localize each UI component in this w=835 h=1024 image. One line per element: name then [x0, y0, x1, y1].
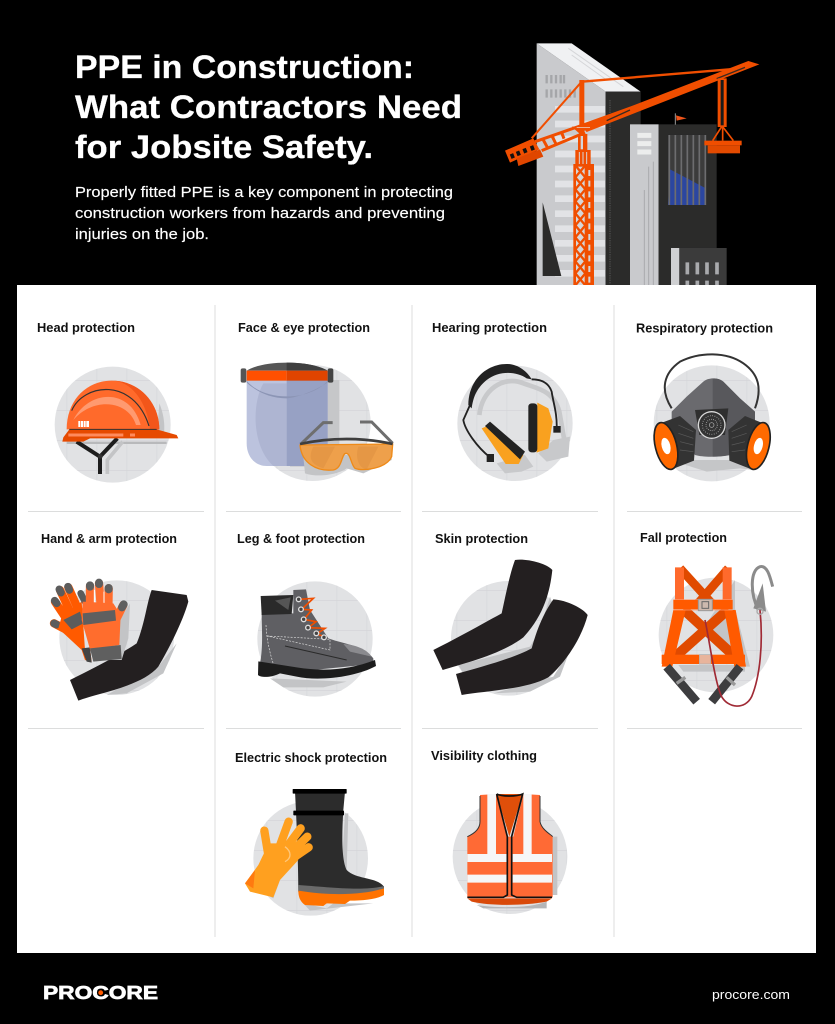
- panel: hand and arm protection: [41, 531, 188, 701]
- icon: high-visibility vest: [453, 794, 567, 914]
- intro text: [75, 185, 453, 243]
- icon: ear muffs: [457, 364, 573, 481]
- logo: Procore: PROCORE: [43, 982, 158, 1003]
- right glove: [82, 583, 124, 662]
- icon: respirator mask: [650, 354, 774, 481]
- heading: electric shock protection: Electric shock protection: [235, 750, 387, 765]
- icon: arm sleeves: [433, 560, 588, 696]
- icon: rubber boot and glove: [245, 789, 384, 916]
- title: What Contractors Need: [75, 89, 462, 125]
- heading: respiratory protection: Respiratory protection: [636, 320, 773, 336]
- panel: head protection: [37, 320, 178, 483]
- heading: face and eye protection: Face & eye protection: [238, 320, 370, 335]
- title: [75, 49, 462, 165]
- panel: fall protection: [640, 530, 773, 706]
- footer website: procore.com: [712, 987, 790, 1002]
- heading: fall protection: Fall protection: [640, 530, 727, 545]
- icon: hard hat: [55, 367, 178, 483]
- title: for Jobsite Safety.: [75, 129, 373, 165]
- heading: hand and arm protection: Hand & arm protection: [41, 531, 177, 546]
- crane hoist and bucket: [704, 78, 742, 153]
- heading: leg and foot protection: Leg & foot protection: [237, 531, 365, 546]
- panel: respiratory protection: [636, 320, 774, 481]
- panel: visibility clothing: [431, 748, 567, 914]
- panel: electric shock protection: [235, 750, 387, 916]
- white panel: [17, 285, 816, 953]
- panel: hearing protection: [432, 320, 573, 481]
- crane jib: [505, 61, 759, 166]
- icon: gloves and arm sleeve: [54, 580, 188, 701]
- intro text: Properly fitted PPE is a key component in protecting: [75, 185, 453, 201]
- panel: face and eye protection: [238, 320, 393, 481]
- heading: visibility clothing: Visibility clothing: [431, 748, 537, 763]
- title: PPE in Construction:: [75, 49, 414, 85]
- panel: leg and foot protection: [237, 531, 376, 697]
- crane mast: [573, 80, 594, 285]
- icon: work boot: [257, 581, 376, 697]
- heading: head protection: Head protection: [37, 320, 135, 335]
- panel: skin protection: [433, 531, 588, 696]
- heading: hearing protection: Hearing protection: [432, 320, 547, 335]
- intro text: construction workers from hazards and preventing: [75, 206, 445, 222]
- heading: skin protection: Skin protection: [435, 531, 528, 546]
- intro text: injuries on the job.: [75, 227, 209, 243]
- icon: safety harness with lanyard: [659, 567, 773, 706]
- left glove: [54, 587, 92, 663]
- illustration: crane and buildings: [505, 43, 759, 285]
- icon: face shield and goggles: [241, 363, 393, 481]
